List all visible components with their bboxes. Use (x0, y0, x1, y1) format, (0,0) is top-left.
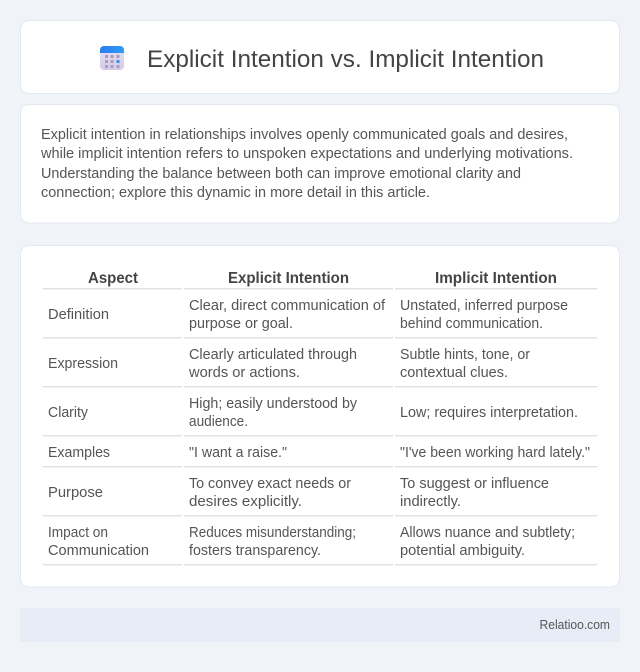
table row: Definition: Clear, direct communication of (189, 298, 386, 314)
table header row: Aspect (88, 270, 138, 287)
text block: introduction (40, 127, 573, 201)
table row: Purpose: desires explicitly. (189, 494, 302, 510)
table row: Impact on Communication: Communication (48, 543, 149, 559)
panel: header (20, 20, 620, 94)
table row: Clarity: audience. (189, 414, 248, 430)
panel: comparison table (20, 246, 620, 587)
table row: Definition: purpose or goal. (189, 316, 293, 332)
text block: introduction: Explicit intention in relationships involves openly communicated goals and desires, (41, 127, 568, 143)
footer text: Relatioo.com (540, 618, 610, 632)
table row: Impact on Communication (43, 525, 597, 566)
table row: Impact on Communication: Impact on (48, 525, 108, 541)
table row: Purpose (43, 476, 597, 516)
table row: Examples: Examples (48, 445, 110, 461)
text block: introduction: while implicit intention refers to unspoken expectations and underlying motivations. (40, 146, 573, 162)
table row: Clarity: High; easily understood by (189, 396, 358, 412)
table row: Examples (43, 445, 597, 468)
table header row (43, 270, 597, 290)
title: Explicit Intention vs. Implicit Intention (147, 46, 544, 73)
table row: Expression: contextual clues. (400, 365, 508, 381)
table row: Impact on Communication: Allows nuance and subtlety; (400, 525, 575, 541)
table header row: Implicit Intention (435, 270, 557, 287)
table header row: Explicit Intention (228, 270, 349, 287)
table row: Purpose: To suggest or influence (400, 476, 549, 492)
table row: Expression: Clearly articulated through (189, 347, 357, 363)
panel: introduction (20, 104, 620, 223)
table row: Impact on Communication: fosters transparency. (189, 543, 321, 559)
table row: Clarity (43, 396, 597, 436)
icon: calendar (100, 46, 124, 70)
table row: Expression: Expression (48, 356, 118, 372)
table row: Definition: Unstated, inferred purpose (400, 298, 568, 314)
table row: Clarity: Low; requires interpretation. (400, 405, 578, 421)
table row: Purpose: To convey exact needs or (189, 476, 351, 492)
text block: introduction: connection; explore this dynamic in more detail in this article. (41, 185, 430, 201)
table row: Definition: Definition (48, 307, 109, 323)
table row: Examples: "I want a raise." (189, 445, 287, 461)
table row: Definition: behind communication. (400, 316, 543, 332)
table row: Impact on Communication: Reduces misunderstanding; (189, 525, 356, 541)
table row: Expression (43, 347, 597, 388)
table row: Impact on Communication: potential ambiguity. (400, 543, 525, 559)
table row: Expression: Subtle hints, tone, or (400, 347, 530, 363)
table row: Clarity: Clarity (48, 405, 89, 421)
table row: Purpose: Purpose (48, 485, 103, 501)
table row: Definition (43, 298, 597, 338)
text block: introduction: Understanding the balance between both can improve emotional clarity and (41, 166, 521, 182)
table row: Purpose: indirectly. (400, 494, 461, 510)
table row: Examples: "I've been working hard lately." (400, 445, 590, 461)
footer (20, 608, 620, 642)
table row: Expression: words or actions. (188, 365, 300, 381)
